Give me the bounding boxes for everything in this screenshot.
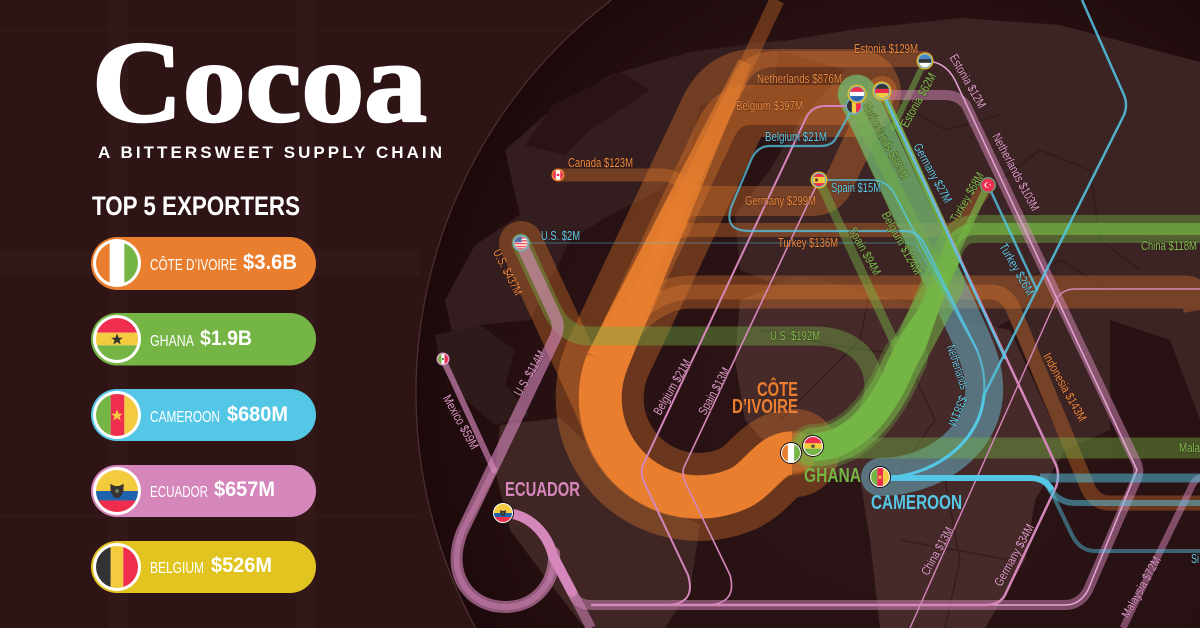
- flow: Netherlands $103M: [503, 95, 1138, 605]
- label: $381M: [945, 393, 970, 428]
- label: Estonia $62M: [898, 71, 939, 130]
- pill: Ecuador: [91, 465, 316, 517]
- flow: Malaysia: [815, 438, 1200, 458]
- label: Indonesia $143M: [1040, 351, 1089, 424]
- flow: Belgium $124M: [813, 106, 945, 447]
- flow: Germany $299M: [600, 91, 882, 497]
- country borders: [760, 50, 1140, 628]
- flow: wide eastern band: [599, 292, 1200, 497]
- green flows from Ghana: [521, 61, 1200, 448]
- flow: diagonal bright core taper: [588, 59, 751, 371]
- flow: top of page: [600, 0, 777, 497]
- flow: Canada $123M: [558, 175, 698, 497]
- label: Germany $299M: [745, 194, 816, 208]
- flag: Belgium: [846, 98, 862, 114]
- heading: top 5 exporters: TOP 5 EXPORTERS: [92, 191, 300, 221]
- flag: Côte d'Ivoire: [780, 442, 802, 464]
- flow: Netherlands $389M: [813, 94, 945, 447]
- flag: Mexico: [436, 352, 450, 366]
- flow: U.S. $114M: [457, 243, 558, 607]
- flow: Spain $13M: [592, 180, 819, 605]
- flow: east middle: [1045, 480, 1200, 503]
- flow: U.S. $2M: [521, 243, 977, 350]
- land: Africa: [735, 275, 1065, 628]
- land: Europe and Asia: [735, 18, 1200, 450]
- pill: Cameroon: $680M: [227, 402, 288, 426]
- flow: eastern trunk: [880, 478, 1052, 490]
- orange flows from Côte d'Ivoire: [521, 0, 1200, 503]
- origin label: Côte d'Ivoire: CÔTE: [757, 377, 798, 401]
- land: South America: [495, 418, 700, 628]
- flow: Malaysia $72M: [1123, 478, 1200, 628]
- pill: Belgium: $526M: [211, 553, 272, 577]
- origin label: Côte d'Ivoire: [732, 377, 798, 418]
- flow: Belgium $397M: [600, 105, 853, 497]
- flow: U.S. $192M: [521, 243, 874, 447]
- pill: Cameroon: [91, 389, 316, 441]
- label: Spain $94M: [846, 225, 884, 278]
- flow: converged bright line: [880, 395, 984, 478]
- flow: Belgium $21M: [729, 106, 984, 395]
- flow: U.S. $437M: [521, 243, 795, 497]
- label: Belgium $21M: [651, 357, 694, 418]
- label: Mexico $59M: [440, 393, 481, 452]
- label: Turkey $26M: [996, 241, 1037, 298]
- flow: off-page branch: [553, 556, 591, 628]
- flag: Netherlands: [848, 84, 866, 104]
- land: North America: [445, 40, 780, 345]
- globe with continents: [416, 0, 1200, 628]
- sankey flows: [443, 0, 1200, 628]
- flag: Estonia: [916, 52, 934, 70]
- pill: Belgium: BELGIUM: [150, 560, 204, 577]
- flow: Ecuador bright core: [503, 513, 572, 592]
- flow: Turkey $26M: [988, 185, 1037, 290]
- flow: Singapore: [1048, 485, 1200, 551]
- subtitle: A BITTERSWEET SUPPLY CHAIN: [98, 143, 442, 162]
- pill: Ghana: GHANA: [150, 333, 194, 350]
- label: Belgium $124M: [879, 209, 925, 277]
- label: Estonia $129M: [854, 42, 918, 56]
- flow: Belgium $21M: [592, 106, 854, 605]
- pill: Belgium: [91, 541, 316, 593]
- pill: Ghana: [91, 313, 316, 366]
- label: U.S. $192M: [770, 329, 820, 343]
- label: Netherlands $103M: [989, 131, 1042, 213]
- label: Malaysia $72M: [1119, 554, 1164, 620]
- label: U.S. $114M: [511, 348, 548, 398]
- flow: Mexico $59M: [443, 359, 494, 470]
- land: Hudson Bay: [525, 72, 650, 155]
- teal flow: Netherlands $381M: [857, 94, 984, 477]
- flag: Germany: [872, 82, 892, 100]
- label: Spain $15M: [831, 181, 881, 195]
- pink flows from Ecuador: [443, 61, 1200, 628]
- label: U.S. $2M: [541, 229, 580, 243]
- pill: Cameroon: CAMEROON: [150, 409, 220, 426]
- origin label: Côte d'Ivoire: D’IVOIRE: [732, 396, 798, 418]
- flow: Turkey $136M: [600, 185, 988, 497]
- flag: Spain: [810, 172, 828, 188]
- label: Germany $27M: [911, 141, 955, 205]
- pill: Côte d'Ivoire: $3.6B: [243, 250, 297, 274]
- land: Central America: [435, 325, 530, 425]
- flag: Canada: [552, 168, 564, 182]
- flow: China $118M: [813, 229, 1200, 447]
- label: Estonia $12M: [947, 52, 989, 111]
- pill: Côte d'Ivoire: [91, 237, 316, 290]
- flow: China $13M: [910, 289, 1200, 628]
- pill: Côte d'Ivoire: CÔTE D’IVOIRE: [150, 255, 237, 274]
- flow: Netherlands $876M: [600, 93, 857, 497]
- flow: Germany $27M: [882, 91, 1005, 358]
- label: Turkey $68M: [948, 170, 987, 225]
- flow: Spain $15M: [819, 180, 977, 350]
- flow: Indonesia $143M: [599, 292, 1200, 503]
- flag: Turkey: [980, 177, 996, 193]
- flow: lower pale halo: [813, 358, 905, 447]
- flow: Germany $34M: [592, 91, 1058, 605]
- flow: Spain $94M: [819, 180, 905, 365]
- pill: Ecuador: ECUADOR: [150, 484, 208, 501]
- label: China $13M: [918, 525, 956, 578]
- flow: green upper taper: [902, 270, 952, 346]
- flow: Germany green: [813, 91, 958, 447]
- origin label: Cameroon: CAMEROON: [871, 492, 962, 514]
- origin label: Ghana: GHANA: [804, 465, 861, 487]
- flow: Estonia $62M: [893, 61, 925, 128]
- flow: Estonia $12M: [592, 61, 1137, 605]
- flag: Ghana: [802, 436, 824, 456]
- label: Netherlands: [944, 343, 971, 391]
- flow: Turkey $68M: [900, 185, 988, 368]
- flow: long line to top: [984, 0, 1126, 395]
- title: Cocoa: [92, 19, 427, 147]
- flow: Côte d'Ivoire bright core: [600, 362, 792, 497]
- flag: U.S.: [512, 234, 530, 252]
- route labels: [440, 42, 1200, 620]
- label: Netherlands $876M: [757, 72, 842, 86]
- blue flows from Cameroon: [521, 0, 1200, 551]
- flow: east upper: [1040, 474, 1200, 482]
- flow: Ghana bright core: [813, 340, 914, 447]
- label: Germany $34M: [991, 522, 1037, 589]
- label: Belgium $21M: [765, 130, 827, 144]
- label: Canada $123M: [568, 156, 633, 170]
- map flags: [436, 52, 996, 524]
- origin label: Ecuador: ECUADOR: [505, 479, 580, 501]
- label: Spain $13M: [696, 365, 733, 417]
- pill: Ghana: $1.9B: [200, 326, 252, 350]
- flag: Cameroon: [870, 466, 890, 488]
- flow: loop inner line: [457, 470, 554, 607]
- flag: Ecuador: [492, 502, 514, 524]
- pill: Ecuador: $657M: [214, 477, 275, 501]
- flow: Estonia $129M: [600, 59, 925, 497]
- label: Turkey $136M: [778, 236, 838, 250]
- flow: unlabeled eastern band: [813, 229, 1200, 447]
- label: U.S. $437M: [490, 247, 525, 298]
- label: Netherlands $389M: [860, 100, 912, 182]
- label: Belgium $397M: [736, 99, 803, 113]
